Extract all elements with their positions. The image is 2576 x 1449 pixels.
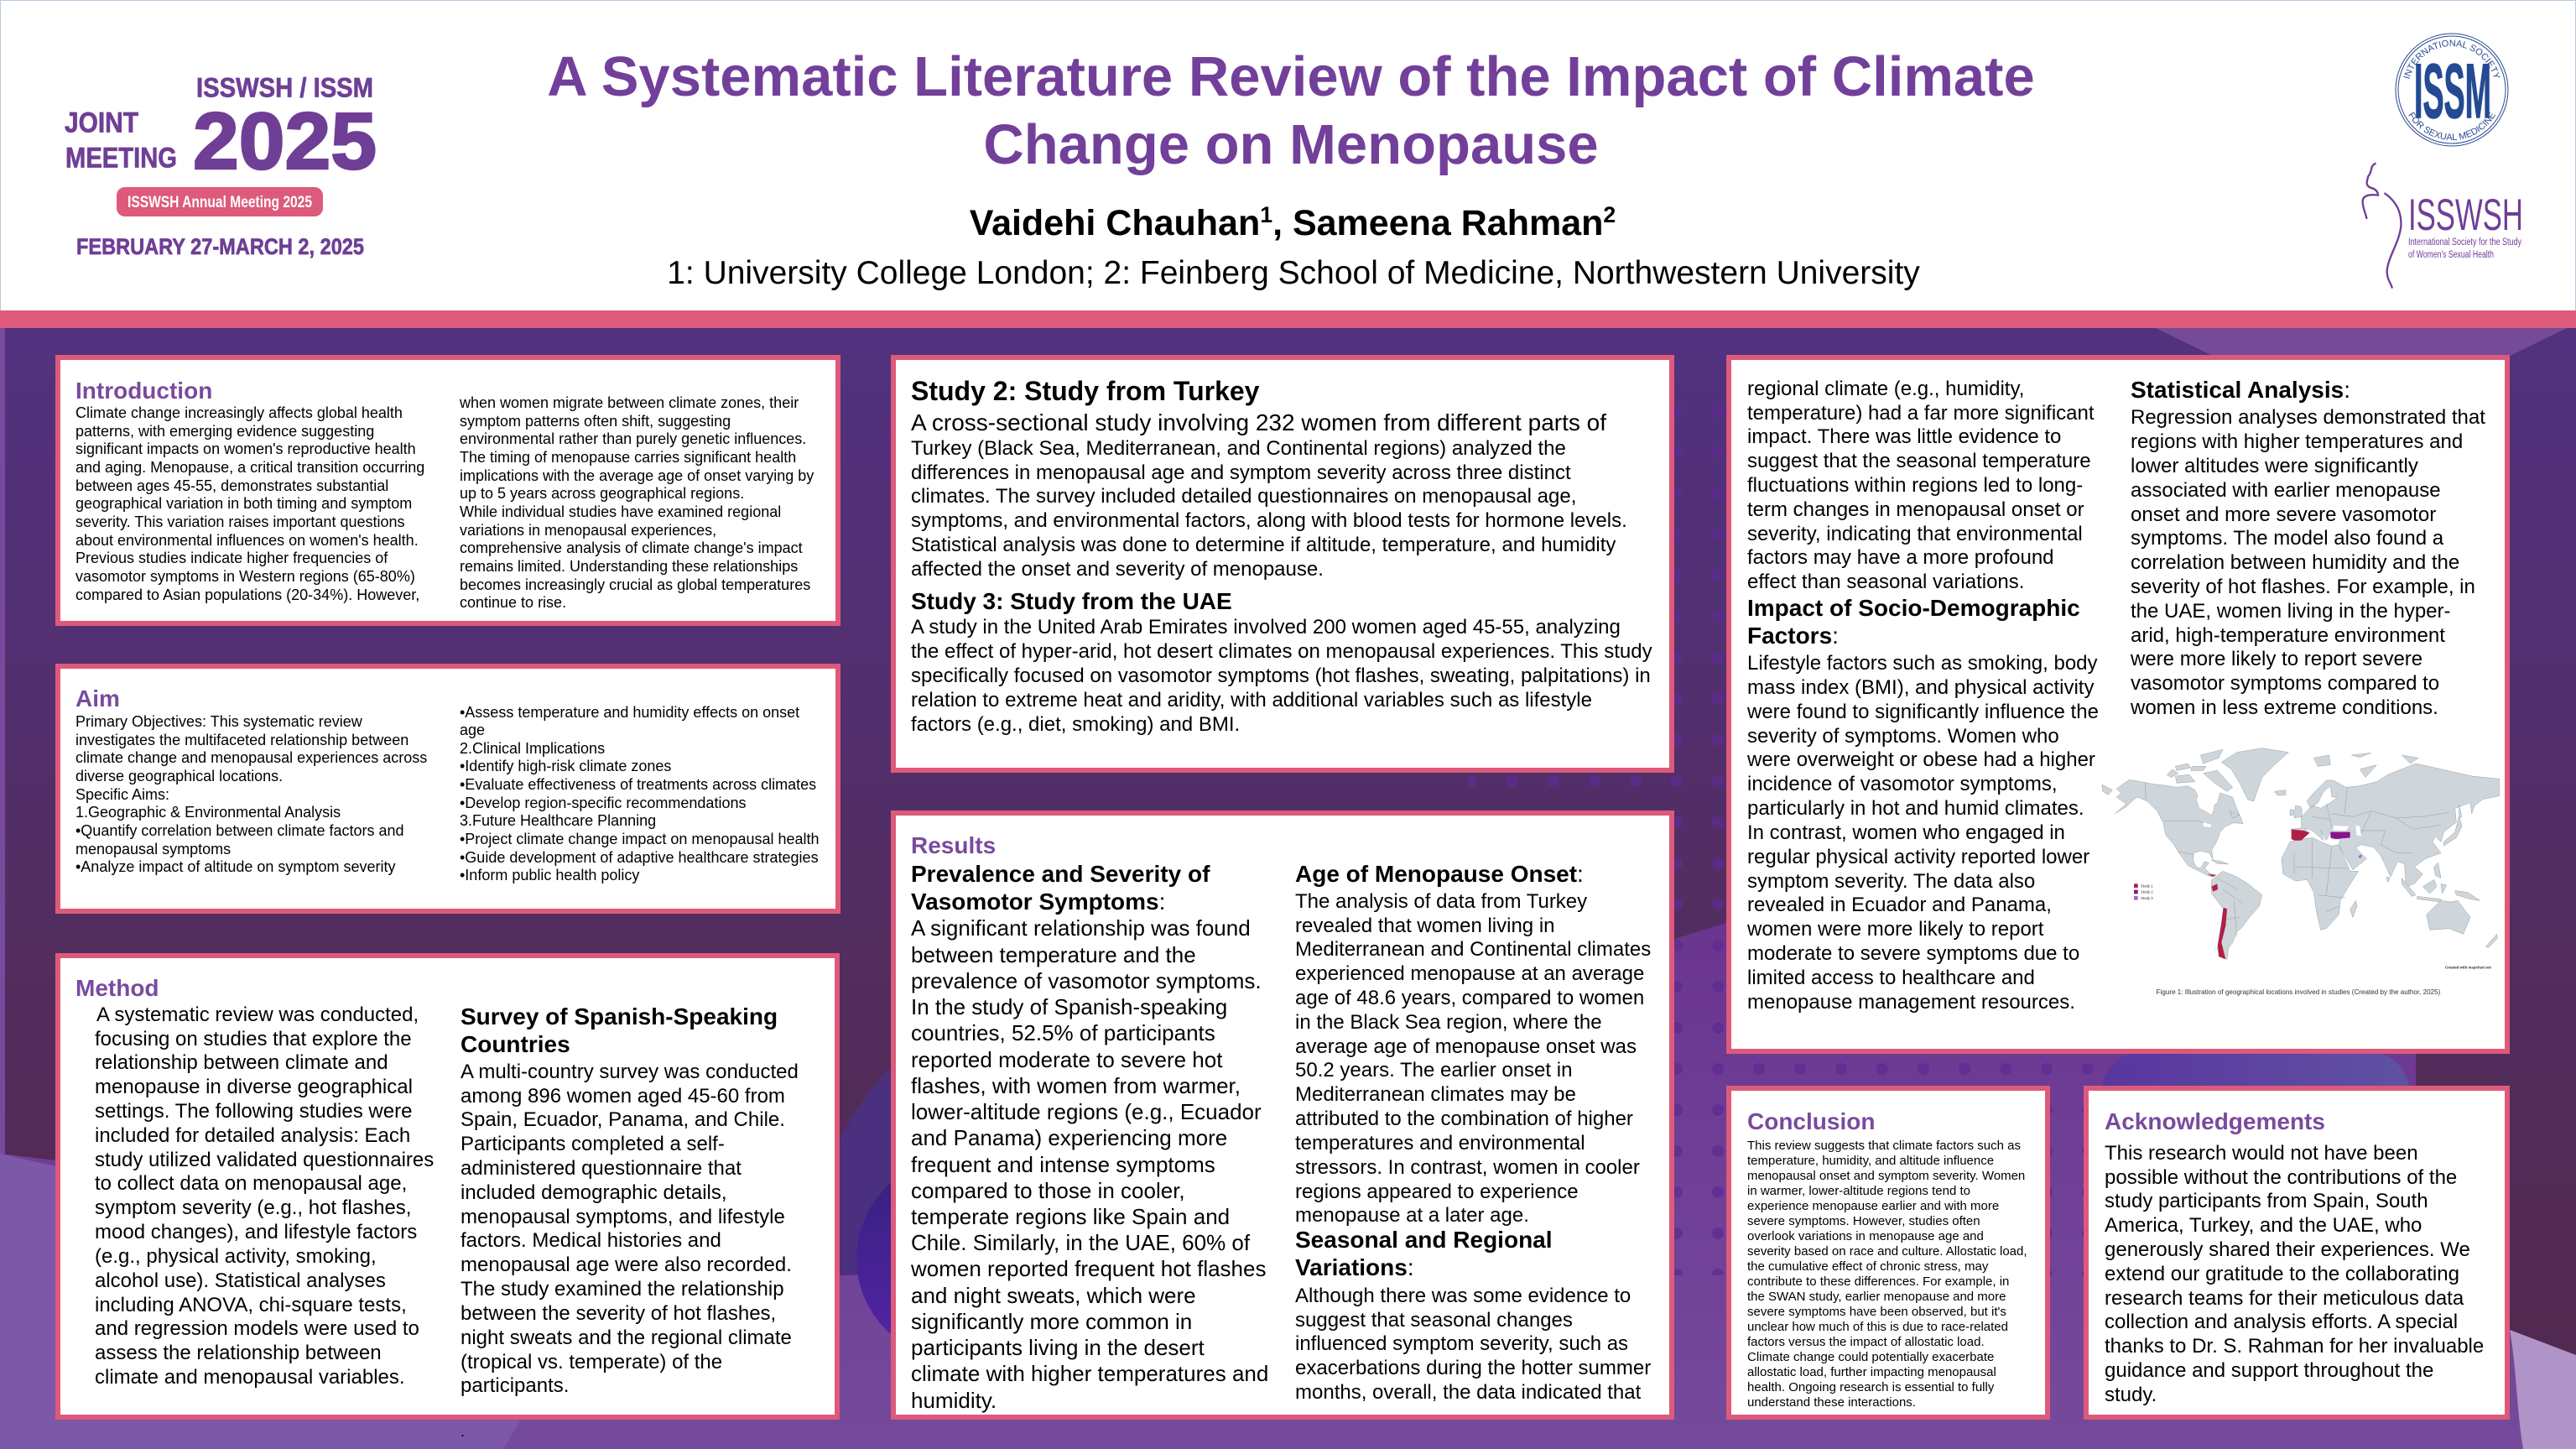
text: aim left column: climate change and menopausal experiences across — [75, 749, 427, 766]
text: introduction right column: environmental rather than purely genetic influences. — [460, 430, 806, 447]
text: aim left column: Primary Objectives: This systematic review — [75, 713, 362, 730]
text: prevalence and severity — [911, 915, 1268, 1413]
text: method description: A systematic review was conducted, — [96, 1003, 419, 1026]
text: study 2 continued: Turkey (Black Sea, Mediterranean, and Continental regions) analyzed the — [911, 437, 1566, 460]
text: seasonal variations continued: regional climate (e.g., humidity, — [1747, 378, 2024, 400]
text: conclusion: severe symptoms. However, studies often — [1747, 1214, 1980, 1228]
text: introduction left column — [75, 404, 424, 603]
text: prevalence and severity: women reported frequent hot flashes — [911, 1256, 1266, 1281]
text: method description: climate and menopausal variables. — [95, 1366, 405, 1389]
subheading: prevalence and severity: Vasomotor Symptoms: — [911, 889, 1165, 915]
text: conclusion — [1747, 1139, 2027, 1410]
text: seasonal and regional variations: months, overall, the data indicated that — [1295, 1381, 1641, 1404]
text: age of menopause onset: Mediterranean climates may be — [1295, 1083, 1576, 1106]
text: study 2 description: A cross-sectional study involving 232 women from different parts of — [911, 409, 1606, 435]
text: aim left column: Specific Aims: — [75, 786, 169, 803]
text: seasonal and regional variations: influenced symptom severity, such as — [1295, 1332, 1628, 1355]
stray footer dot: . — [461, 1423, 465, 1440]
text: survey description: Participants completed a self- — [461, 1133, 725, 1155]
heading: study 2: Study 2: Study from Turkey — [911, 376, 1259, 406]
text: acknowledgements: collection and analysis efforts. A special — [2105, 1311, 2458, 1333]
title — [547, 45, 2035, 176]
subheading: age of menopause onset: Age of Menopause Onset: — [1295, 861, 1584, 887]
text: acknowledgements: possible without the contributions of the — [2105, 1166, 2457, 1189]
text: method description: mood changes), and lifestyle factors — [95, 1221, 417, 1243]
text: study 2 continued: climates. The survey included detailed questionnaires on menopausal age, — [911, 485, 1576, 508]
text: introduction left column: about environmental influences on women's health. — [75, 532, 419, 549]
text: socio-demographic factors: revealed in Ecuador and Panama, — [1747, 894, 2052, 916]
text: conclusion: temperature, humidity, and altitude influence — [1747, 1154, 1994, 1168]
text: socio-demographic factors: were overweight or obese had a higher — [1747, 748, 2095, 771]
panel: method — [55, 953, 840, 1420]
text: introduction right column — [460, 394, 814, 611]
world map figure — [2102, 748, 2500, 996]
text: seasonal variations continued — [1747, 378, 2095, 593]
text: study 2 continued — [911, 437, 1627, 581]
text: method description: to collect data on menopausal age, — [95, 1172, 407, 1195]
text: aim right column: •Guide development of adaptive healthcare strategies — [460, 849, 819, 866]
heading: survey of Spanish-speaking countries: Countries — [461, 1031, 570, 1057]
heading: aim: Aim — [75, 685, 120, 711]
text: study 3 description: relation to extreme heat and aridity, with additional variables such as lifestyle — [911, 689, 1592, 711]
text: method description: including ANOVA, chi-square tests, — [95, 1294, 407, 1316]
text: socio-demographic factors: regular physical activity reported lower — [1747, 846, 2089, 868]
pink divider bar — [0, 310, 2576, 328]
map legend: Study 2 — [2141, 890, 2153, 894]
text: prevalence and severity: lower-altitude regions (e.g., Ecuador — [911, 1099, 1262, 1124]
text: study 3 description — [911, 616, 1652, 736]
text: acknowledgements: thanks to Dr. S. Rahman for her invaluable — [2105, 1335, 2484, 1358]
text: method description: relationship between climate and — [95, 1051, 388, 1074]
world map figure: Figure 1: Illustration of geographical locations involved in studies (Created by the author, 2025) — [2157, 988, 2441, 996]
text: introduction right column: variations in menopausal experiences, — [460, 522, 716, 539]
text: method description — [95, 1003, 434, 1389]
text: introduction right column: when women migrate between climate zones, their — [460, 394, 799, 411]
text: seasonal and regional variations: exacerbations during the hotter summer — [1295, 1357, 1651, 1379]
text: statistical analysis: severity of hot flashes. For example, in — [2131, 576, 2475, 598]
text: aim left column: •Analyze impact of altitude on symptom severity — [75, 858, 395, 875]
text: method description: focusing on studies that explore the — [95, 1028, 412, 1050]
text: survey description — [461, 1061, 799, 1397]
text: introduction left column: compared to Asian populations (20-34%). However, — [75, 586, 419, 603]
subheading: statistical analysis: Statistical Analysis: — [2131, 377, 2350, 403]
text: seasonal variations continued: factors may have a more profound — [1747, 546, 2054, 569]
text: prevalence and severity: prevalence of vasomotor symptoms. — [911, 968, 1262, 993]
text: aim left column: •Quantify correlation between climate factors and — [75, 822, 404, 839]
text: conclusion: contribute to these differences. For example, in — [1747, 1274, 2009, 1289]
text: prevalence and severity: reported moderate to severe hot — [911, 1047, 1222, 1072]
text: study 2 continued: affected the onset and severity of menopause. — [911, 558, 1324, 581]
text: introduction right column: becomes increasingly crucial as global temperatures — [460, 576, 810, 593]
text: aim right column: •Identify high-risk climate zones — [460, 758, 671, 774]
text: prevalence and severity: and night sweats, which were — [911, 1283, 1196, 1308]
text: method description: included for detailed analysis: Each — [95, 1124, 410, 1147]
heading: survey of Spanish-speaking countries: Survey of Spanish-Speaking — [461, 1003, 778, 1029]
subheading: prevalence and severity — [911, 861, 1210, 915]
subheading: seasonal and regional variations: Variations: — [1295, 1254, 1414, 1280]
text: introduction left column: and aging. Menopause, a critical transition occurring — [75, 459, 424, 476]
text: age of menopause onset: menopause at a later age. — [1295, 1204, 1529, 1227]
heading: introduction: Introduction — [75, 378, 212, 403]
text: conclusion: understand these interactions. — [1747, 1395, 1916, 1410]
text: seasonal variations continued: term changes in menopausal onset or — [1747, 498, 2084, 521]
text: conclusion: This review suggests that climate factors such as — [1747, 1139, 2021, 1153]
highlighted study countries — [2208, 829, 2362, 959]
text: introduction right column: remains limited. Understanding these relationships — [460, 558, 798, 575]
text: study 2 continued: Statistical analysis was done to determine if altitude, temperature, and humidity — [911, 534, 1616, 556]
text: age of menopause onset: temperatures and environmental — [1295, 1132, 1585, 1155]
subheading: seasonal and regional variations: Seasonal and Regional — [1295, 1227, 1553, 1253]
text: age of menopause onset: 50.2 years. The earlier onset in — [1295, 1059, 1572, 1082]
text: aim right column: •Assess temperature and humidity effects on onset — [460, 703, 799, 720]
panel: acknowledgements — [2084, 1086, 2510, 1420]
header band — [0, 0, 2576, 310]
text: seasonal and regional variations: suggest that seasonal changes — [1295, 1309, 1573, 1332]
text: socio-demographic factors: symptom severity. The data also — [1747, 869, 2035, 893]
panel: results — [891, 811, 1674, 1420]
title: Change on Menopause — [983, 113, 1599, 176]
text: socio-demographic factors: severity of symptoms. Women who — [1747, 725, 2059, 748]
text: prevalence and severity: In the study of Spanish-speaking — [911, 994, 1227, 1019]
text: statistical analysis: the UAE, women living in the hyper- — [2131, 600, 2451, 623]
heading: study 3: Study 3: Study from the UAE — [911, 587, 1232, 614]
text: socio-demographic factors: were found to significantly influence the — [1747, 701, 2099, 723]
text: seasonal variations continued: temperature) had a far more significant — [1747, 402, 2095, 425]
text: acknowledgements: This research would not have been — [2105, 1142, 2418, 1165]
text: socio-demographic factors: menopause management resources. — [1747, 991, 2075, 1014]
logo: ISSWSH / ISSM joint meeting 2025: 2025 — [193, 96, 377, 186]
text: statistical analysis: regions with higher temperatures and — [2131, 430, 2463, 453]
text: aim right column: •Project climate change impact on menopausal health — [460, 831, 820, 847]
text: prevalence and severity: frequent and intense symptoms — [911, 1151, 1215, 1176]
text: seasonal variations continued: fluctuations within regions led to long- — [1747, 474, 2083, 497]
text: statistical analysis: lower altitudes were significantly — [2131, 455, 2418, 477]
text: statistical analysis: were more likely to report severe — [2131, 648, 2422, 670]
text: acknowledgements: generously shared their experiences. We — [2105, 1238, 2470, 1261]
text: acknowledgements: guidance and support throughout the — [2105, 1359, 2433, 1382]
text: aim right column: •Evaluate effectiveness of treatments across climates — [460, 776, 816, 793]
text: age of menopause onset: stressors. In contrast, women in cooler — [1295, 1156, 1640, 1179]
text: acknowledgements — [2105, 1142, 2484, 1406]
text: prevalence and severity: significantly more common in — [911, 1309, 1192, 1334]
text: survey description: participants. — [461, 1374, 569, 1397]
text: socio-demographic factors: particularly in hot and humid climates. — [1747, 797, 2084, 820]
text: survey description: A multi-country survey was conducted — [461, 1061, 799, 1083]
text: introduction right column: While individual studies have examined regional — [460, 503, 781, 520]
panel: introduction — [55, 355, 840, 626]
text: acknowledgements: study participants from Spain, South — [2105, 1190, 2428, 1212]
logo: ISSWSH / ISSM joint meeting 2025: MEETING — [65, 142, 177, 174]
subheading: impact of socio-demographic factors — [1747, 594, 2080, 649]
text: statistical analysis: Regression analyses demonstrated that — [2131, 406, 2485, 429]
text: method description: settings. The following studies were — [95, 1100, 412, 1123]
text: statistical analysis: women in less extreme conditions. — [2131, 696, 2438, 719]
logo: ISSWSH: of Women's Sexual Health — [2408, 250, 2494, 260]
text: seasonal variations continued: impact. There was little evidence to — [1747, 425, 2061, 448]
text: survey description: administered questionnaire that — [461, 1157, 742, 1180]
text: method description: (e.g., physical activity, smoking, — [95, 1245, 377, 1268]
text: survey description: night sweats and the regional climate — [461, 1327, 792, 1349]
text: aim right column: •Develop region-specific recommendations — [460, 795, 746, 811]
subheading: prevalence and severity: Prevalence and Severity of — [911, 861, 1210, 887]
text: acknowledgements: extend our gratitude to the collaborating — [2105, 1263, 2459, 1285]
subheading: impact of socio-demographic factors: Impact of Socio-Demographic — [1747, 594, 2080, 621]
text: acknowledgements: research teams for their meticulous data — [2105, 1287, 2464, 1310]
text: study 3 description: A study in the United Arab Emirates involved 200 women aged 45-55, analyzing — [911, 616, 1621, 638]
text: prevalence and severity: humidity. — [911, 1388, 997, 1413]
text: conclusion: experience menopause earlier and with more — [1747, 1199, 1999, 1213]
text: aim right column — [460, 703, 820, 883]
text: survey description: included demographic details, — [461, 1181, 727, 1204]
text: age of menopause onset: in the Black Sea region, where the — [1295, 1011, 1602, 1034]
text: introduction right column: comprehensive analysis of climate change's impact — [460, 539, 803, 556]
text: seasonal variations continued: effect than seasonal variations. — [1747, 571, 2024, 593]
text: seasonal and regional variations: Although there was some evidence to — [1295, 1285, 1631, 1307]
text: survey description: among 896 women aged 45-60 from — [461, 1085, 785, 1108]
affiliations: 1: University College London; 2: Feinberg School of Medicine, Northwestern University — [667, 255, 1920, 290]
logo: ISSM: INTERNATIONAL SOCIETY — [2403, 40, 2501, 79]
subheading: impact of socio-demographic factors: Factors: — [1747, 623, 1839, 649]
text: aim left column: diverse geographical locations. — [75, 768, 283, 784]
text: age of menopause onset: revealed that women living in — [1295, 915, 1555, 937]
text: method description: symptom severity (e.g., hot flashes, — [95, 1196, 411, 1219]
text: study 3 description: specifically focused on vasomotor symptoms (hot flashes, sweating, palpitations) in — [911, 665, 1651, 687]
logo: ISSM: FOR SEXUAL MEDICINE — [2408, 112, 2495, 141]
text: socio-demographic factors: In contrast, women who engaged in — [1747, 821, 2065, 844]
heading: results: Results — [911, 832, 996, 857]
text: socio-demographic factors: mass index (BMI), and physical activity — [1747, 676, 2094, 699]
text: study 3 description: factors (e.g., diet, smoking) and BMI. — [911, 713, 1240, 736]
background with abstract purple shapes — [0, 328, 2576, 1449]
text: introduction right column: symptom patterns often shift, suggesting — [460, 413, 731, 430]
text: seasonal variations continued: suggest that the seasonal temperature — [1747, 450, 2091, 472]
logo: ISSM — [2396, 34, 2508, 146]
text: aim left column: menopausal symptoms — [75, 841, 231, 857]
subheading: seasonal and regional variations — [1295, 1227, 1553, 1280]
text: acknowledgements: study. — [2105, 1384, 2157, 1406]
map legend — [2134, 883, 2153, 900]
text: age of menopause onset: average age of menopause onset was — [1295, 1035, 1637, 1058]
text: introduction left column: significant impacts on women's reproductive health — [75, 440, 416, 457]
text: aim left column: 1.Geographic & Environmental Analysis — [75, 804, 341, 821]
text: conclusion: in warmer, lower-altitude regions tend to — [1747, 1184, 1970, 1198]
text: age of menopause onset: The analysis of data from Turkey — [1295, 890, 1587, 913]
text: acknowledgements: America, Turkey, and the UAE, who — [2105, 1214, 2422, 1237]
text: conclusion: severity based on race and culture. Allostatic load, — [1747, 1244, 2027, 1259]
text: introduction right column: The timing of menopause carries significant health — [460, 449, 796, 466]
text: conclusion: menopausal onset and symptom severity. Women — [1747, 1169, 2025, 1183]
text: statistical analysis: correlation between humidity and the — [2131, 551, 2459, 574]
logo: ISSWSH / ISSM joint meeting 2025: ISSWSH Annual Meeting 2025 — [127, 194, 312, 211]
text: age of menopause onset: attributed to the combination of higher — [1295, 1108, 1633, 1130]
text: socio-demographic factors: incidence of vasomotor symptoms, — [1747, 773, 2057, 795]
panel: results continued with map — [1726, 355, 2510, 1054]
text: method description: assess the relationship between — [95, 1342, 382, 1364]
text: statistical analysis: onset and more severe vasomotor — [2131, 503, 2436, 526]
text: survey description: (tropical vs. temperate) of the — [461, 1351, 722, 1373]
text: survey description: menopausal age were also recorded. — [461, 1254, 792, 1276]
text: socio-demographic factors: moderate to severe symptoms due to — [1747, 942, 2079, 965]
text: prevalence and severity: temperate regions like Spain and — [911, 1204, 1230, 1229]
logo: ISSWSH — [2362, 163, 2523, 289]
text: survey description: menopausal symptoms, and lifestyle — [461, 1206, 785, 1228]
text: survey description: between the severity of hot flashes, — [461, 1302, 776, 1325]
text: study 2 continued: differences in menopausal age and symptom severity across three distinct — [911, 461, 1571, 484]
text: prevalence and severity: A significant relationship was found — [911, 915, 1251, 941]
text: introduction left column: vasomotor symptoms in Western regions (65-80%) — [75, 568, 415, 585]
logo: ISSWSH / ISSM joint meeting 2025 — [65, 73, 377, 259]
text: prevalence and severity: participants living in the desert — [911, 1335, 1205, 1360]
text: age of menopause onset: regions appeared to experience — [1295, 1181, 1579, 1203]
text: introduction left column: Previous studies indicate higher frequencies of — [75, 550, 388, 566]
text: socio-demographic factors — [1747, 652, 2099, 1014]
text: age of menopause onset: experienced menopause at an average — [1295, 962, 1644, 985]
text: conclusion: factors versus the impact of allostatic load. — [1747, 1335, 1985, 1349]
text: introduction left column: severity. This variation raises important questions — [75, 513, 405, 530]
heading: method: Method — [75, 975, 159, 1000]
text: aim right column: •Inform public health policy — [460, 867, 639, 883]
map legend: Study 1 — [2141, 884, 2153, 889]
logo: ISSWSH / ISSM joint meeting 2025: FEBRUARY 27-MARCH 2, 2025 — [76, 234, 364, 259]
text: conclusion: the cumulative effect of chronic stress, may — [1747, 1259, 1988, 1274]
text: survey description: Spain, Ecuador, Panama, and Chile. — [461, 1108, 785, 1131]
world map figure: Created with mapchart.net — [2445, 966, 2492, 970]
text: seasonal and regional variations — [1295, 1285, 1651, 1404]
panel: conclusion — [1726, 1086, 2050, 1420]
text: conclusion: allostatic load, further impacting menopausal — [1747, 1365, 1996, 1379]
text: age of menopause onset — [1295, 890, 1651, 1227]
heading: conclusion: Conclusion — [1747, 1108, 1875, 1134]
text: study 3 description: the effect of hyper-arid, hot desert climates on menopausal experiences. This study — [911, 640, 1652, 663]
text: method description: menopause in diverse geographical — [95, 1076, 413, 1098]
text: conclusion: unclear how much of this is due to race-related — [1747, 1320, 2008, 1334]
text: aim left column: investigates the multifaceted relationship between — [75, 732, 409, 748]
text: method description: alcohol use). Statistical analyses — [95, 1269, 386, 1292]
text: introduction right column: continue to rise. — [460, 594, 566, 611]
text: introduction left column: patterns, with emerging evidence suggesting — [75, 423, 374, 440]
text: conclusion: the SWAN study, earlier menopause and more — [1747, 1290, 2006, 1304]
panel: aim — [55, 664, 840, 914]
text: prevalence and severity: flashes, with women from warmer, — [911, 1073, 1241, 1098]
text: introduction left column: geographical variation in both timing and symptom — [75, 495, 412, 512]
text: age of menopause onset: Mediterranean and Continental climates — [1295, 938, 1651, 961]
text: statistical analysis: symptoms. The model also found a — [2131, 527, 2443, 550]
text: prevalence and severity: between temperature and the — [911, 942, 1196, 967]
text: prevalence and severity: Chile. Similarly, in the UAE, 60% of — [911, 1230, 1250, 1255]
text: aim right column: 3.Future Healthcare Planning — [460, 812, 656, 829]
text: prevalence and severity: climate with higher temperatures and — [911, 1361, 1268, 1386]
text: conclusion: severe symptoms have been observed, but it's — [1747, 1305, 2006, 1319]
text: prevalence and severity: and Panama) experiencing more — [911, 1125, 1227, 1150]
text: statistical analysis: vasomotor symptoms compared to — [2131, 672, 2439, 695]
text: study 2 continued: symptoms, and environmental factors, along with blood tests for hormone levels. — [911, 509, 1627, 532]
text: conclusion: health. Ongoing research is essential to fully — [1747, 1380, 1994, 1394]
text: prevalence and severity: countries, 52.5% of participants — [911, 1020, 1215, 1045]
text: socio-demographic factors: women were more likely to report — [1747, 918, 2043, 941]
logo: ISSWSH / ISSM joint meeting 2025: ISSWSH / ISSM — [196, 73, 373, 103]
seas on the map — [2204, 822, 2361, 837]
text: introduction left column: Climate change increasingly affects global health — [75, 404, 403, 421]
text: socio-demographic factors: Lifestyle factors such as smoking, body — [1747, 652, 2098, 675]
text: conclusion: overlook variations in menopause age and — [1747, 1229, 1984, 1243]
authors: Vaidehi Chauhan1, Sameena Rahman2 — [970, 202, 1616, 243]
text: method description: study utilized validated questionnaires — [95, 1149, 434, 1171]
text: aim right column: 2.Clinical Implications — [460, 740, 605, 757]
heading: survey of Spanish-speaking countries — [461, 1003, 778, 1057]
text: seasonal variations continued: severity, indicating that environmental — [1747, 523, 2083, 545]
text: statistical analysis — [2131, 406, 2485, 719]
map legend: Study 3 — [2141, 896, 2153, 900]
panel: studies 2 and 3 — [891, 355, 1674, 773]
heading: acknowledgements: Acknowledgements — [2105, 1108, 2325, 1134]
text: conclusion: Climate change could potentially exacerbate — [1747, 1350, 1994, 1364]
text: method description: and regression models were used to — [95, 1317, 419, 1340]
text: survey description: factors. Medical histories and — [461, 1229, 721, 1252]
logo: ISSWSH / ISSM joint meeting 2025: JOINT — [65, 107, 138, 139]
text: prevalence and severity: compared to those in cooler, — [911, 1178, 1185, 1203]
text: socio-demographic factors: limited access to healthcare and — [1747, 967, 2035, 989]
text: introduction right column: implications with the average age of onset varying by — [460, 467, 814, 484]
text: aim right column: age — [460, 722, 485, 738]
text: introduction left column: between ages 45-55, demonstrates substantial — [75, 477, 388, 494]
text: statistical analysis: arid, high-temperature environment — [2131, 624, 2445, 647]
text: statistical analysis: associated with earlier menopause — [2131, 479, 2441, 502]
text: survey description: The study examined the relationship — [461, 1278, 784, 1300]
text: age of menopause onset: age of 48.6 years, compared to women — [1295, 987, 1644, 1009]
text: introduction right column: up to 5 years across geographical regions. — [460, 485, 744, 502]
title: A Systematic Literature Review of the Impact of Climate — [547, 45, 2035, 107]
text: aim left column — [75, 713, 427, 875]
